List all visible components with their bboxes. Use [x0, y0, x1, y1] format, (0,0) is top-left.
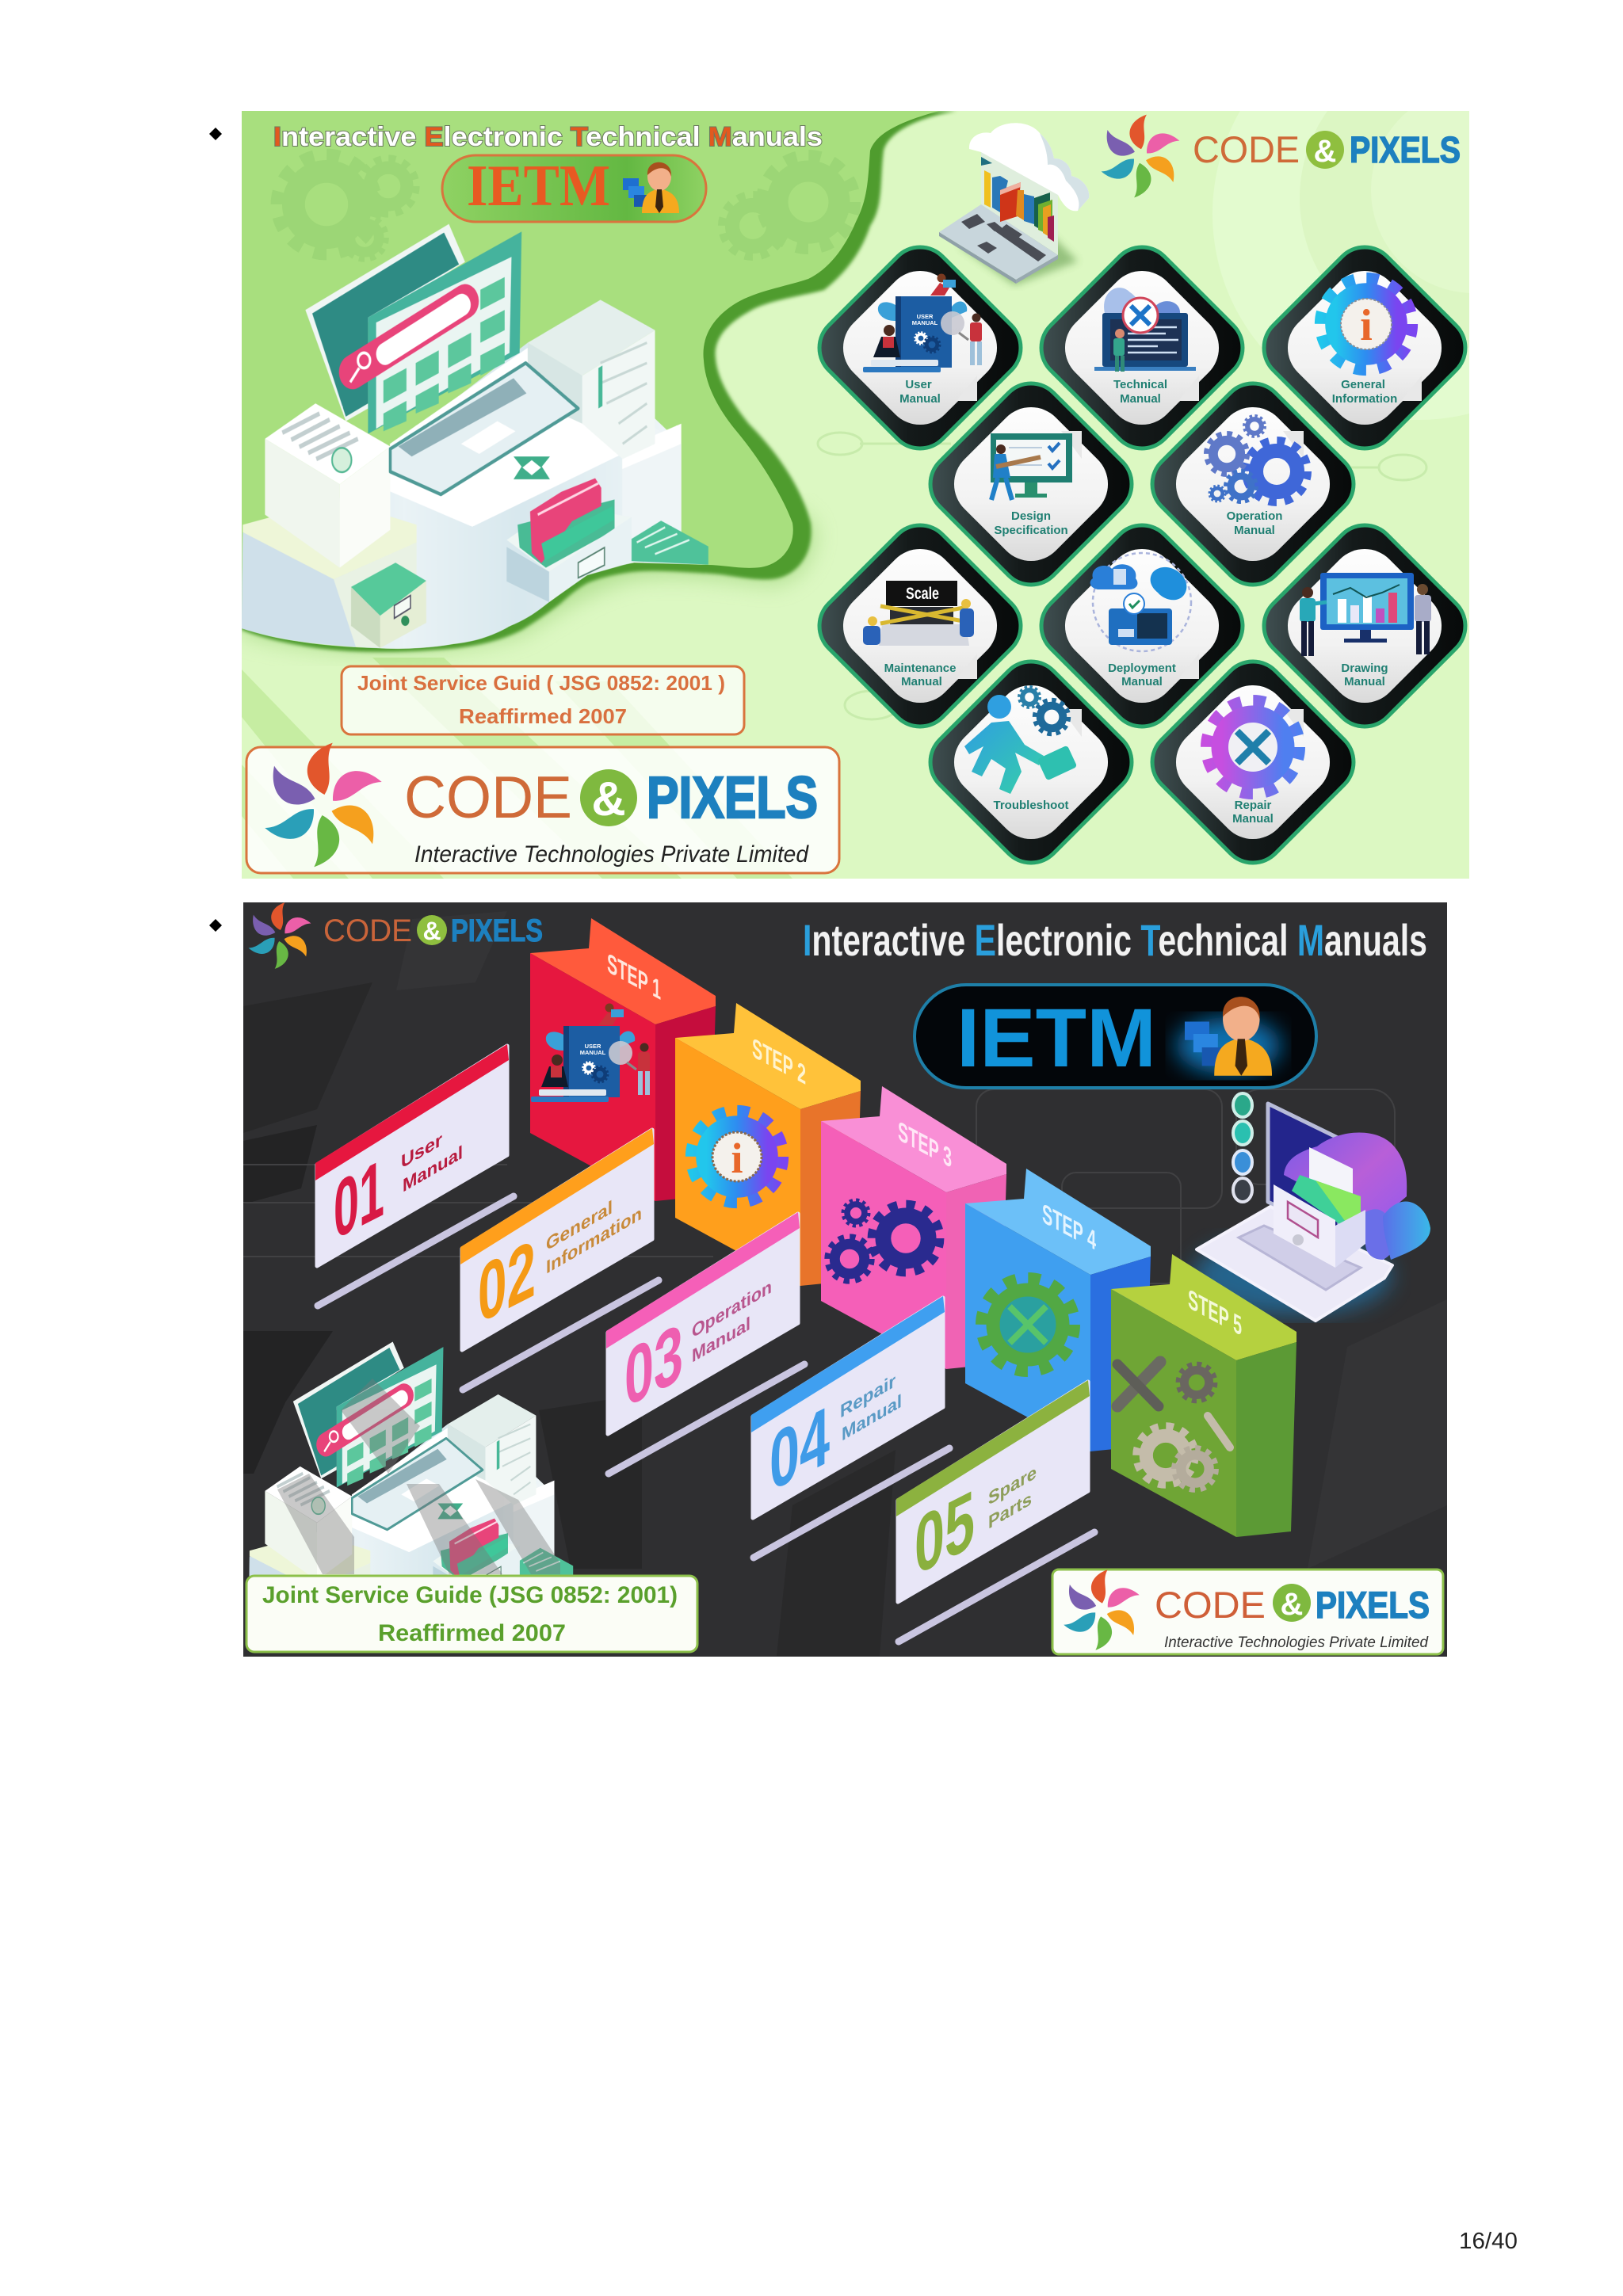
card 04: Repair [840, 1371, 896, 1423]
card 05: 05 [915, 1472, 975, 1593]
diamond: Operation Manual: Operation [1227, 509, 1282, 523]
diamond: Drawing Manual: Manual [1344, 675, 1385, 688]
step 1 block: STEP 1 [607, 947, 661, 1006]
step 2 block [675, 1003, 861, 1286]
IETM pill [442, 154, 706, 222]
diamond: Deployment Manual: Deployment [1108, 662, 1176, 675]
step 5 block [1111, 1254, 1296, 1537]
bullet 1 [209, 128, 222, 140]
card 03: Manual [692, 1314, 750, 1367]
logo: top right [1100, 115, 1461, 197]
card 02 [460, 1128, 659, 1390]
title: Interactive Electronic Technical Manuals [273, 122, 823, 152]
logo box: bottom left: PIXELS [647, 765, 818, 830]
diamond: Deployment Manual [1040, 523, 1244, 729]
translucent stripes over illustration [277, 1379, 560, 1574]
logo box: bottom left: CODE [404, 764, 572, 830]
callout: joint service guide: Reaffirmed 2007 [459, 704, 627, 728]
step 3 block: STEP 3 [898, 1115, 952, 1174]
card 04 [751, 1296, 949, 1558]
logo box: bottom right: & [1281, 1587, 1303, 1622]
card 01: Manual [403, 1142, 463, 1197]
card 02: General [546, 1197, 613, 1256]
diamond: Maintenance Manual: Maintenance [884, 662, 956, 675]
logo: top left [247, 902, 543, 969]
background gears [278, 156, 854, 259]
pale circles upper right [1212, 111, 1469, 420]
diamond: Technical Manual: Technical [1113, 378, 1167, 391]
diamond: User Manual: MANUAL [912, 319, 938, 326]
step 2 block: i [731, 1135, 743, 1182]
diamond: Operation Manual: Manual [1234, 524, 1275, 537]
logo: top right: PIXELS [1350, 129, 1461, 170]
illustration: laptop, documents and file drawers [242, 224, 708, 649]
logo: top left: CODE [323, 913, 412, 948]
diamond: Troubleshoot: Troubleshoot [994, 799, 1068, 812]
IETM pill: IETM [957, 992, 1156, 1085]
diamond: Drawing Manual: Drawing [1341, 662, 1388, 675]
icon: cloud library laptop [939, 123, 1089, 285]
card 05: Parts [988, 1489, 1032, 1534]
card 03: 03 [624, 1305, 683, 1425]
card 01: 01 [334, 1141, 384, 1257]
step 4 block [965, 1169, 1151, 1451]
card 03: Operation [692, 1276, 772, 1343]
diamond: Design Specification [929, 382, 1133, 586]
callout: joint service guide: Joint Service Guid ( JSG 0852: 2001 ) [357, 671, 725, 695]
logo box: bottom right: CODE [1155, 1584, 1266, 1626]
page number: 16/40 [1459, 2229, 1518, 2254]
diamond: Deployment Manual: Manual [1121, 675, 1163, 688]
panel background [242, 111, 1469, 879]
diamond: Technical Manual [1040, 246, 1244, 450]
diamond: Repair Manual: Repair [1235, 799, 1272, 812]
diamond: User Manual: Manual [899, 392, 941, 406]
logo: top left: & [422, 917, 441, 945]
panel: IETM dark steps [243, 902, 1447, 1657]
diamond: User Manual: User [905, 378, 932, 391]
card 01 [315, 1044, 514, 1306]
step 3 block [821, 1086, 1006, 1369]
diamond: Operation Manual [1151, 382, 1355, 586]
diamond: Drawing Manual [1262, 523, 1468, 729]
card 05: Spare [988, 1462, 1037, 1510]
diamond: General Information [1262, 246, 1468, 450]
card 02: Information [546, 1203, 642, 1279]
wave dark edge [242, 111, 957, 652]
callout: joint service guide [246, 1576, 697, 1652]
panel: IETM green overview [242, 111, 1469, 879]
diamond: Technical Manual: Manual [1120, 392, 1161, 406]
icon: cloud laptop with folders [1193, 1093, 1430, 1321]
callout: joint service guide [342, 666, 744, 734]
card 02: 02 [478, 1222, 536, 1341]
step 4 block: STEP 4 [1042, 1197, 1096, 1257]
diamond: Repair Manual [1151, 659, 1355, 865]
card 05 [896, 1380, 1094, 1642]
step 1 block [530, 918, 716, 1201]
card 01: User [401, 1129, 442, 1173]
logo: top right: CODE [1193, 128, 1300, 170]
title: Interactive Electronic Technical Manuals [803, 915, 1427, 965]
card 04: Manual [842, 1391, 902, 1446]
step 5 block: STEP 5 [1188, 1283, 1242, 1342]
diamond: Design Specification: Specification [994, 524, 1068, 537]
logo box: bottom left: & [591, 772, 626, 826]
diamond: Repair Manual: Manual [1232, 812, 1274, 826]
diamond: Maintenance Manual: Scale [906, 585, 939, 603]
IETM pill: IETM [467, 154, 610, 219]
callout: joint service guide: Joint Service Guide (JSG 0852: 2001) [262, 1582, 678, 1608]
diamond: Troubleshoot [929, 659, 1133, 865]
callout: joint service guide: Reaffirmed 2007 [378, 1620, 566, 1646]
bullet 2 [209, 919, 222, 932]
IETM pill [915, 985, 1316, 1088]
diamond: User Manual [818, 246, 1022, 450]
step 1 block: USER [585, 1043, 601, 1050]
panel background [243, 902, 1447, 1657]
illustration: faded laptop and files [249, 1341, 573, 1637]
diamond: General Information: Information [1332, 392, 1397, 406]
logo: top left: PIXELS [451, 913, 543, 948]
logo box: bottom right: Interactive Technologies Private Limited [1164, 1634, 1429, 1651]
card 03 [606, 1212, 804, 1474]
logo box: bottom right: PIXELS [1316, 1584, 1430, 1626]
diamond: Maintenance Manual: Manual [901, 675, 942, 688]
faint circuit lines [818, 433, 1426, 719]
logo: top right: & [1314, 134, 1336, 169]
logo box: bottom left: Interactive Technologies Private Limited [414, 841, 809, 868]
diamond: Maintenance Manual [818, 523, 1022, 729]
diamond: General Information: i [1360, 301, 1373, 350]
diamond: General Information: General [1341, 378, 1385, 391]
diamond: Design Specification: Design [1011, 509, 1051, 523]
step 1 block: MANUAL [580, 1049, 606, 1056]
logo box: bottom left [246, 743, 839, 873]
background texture [243, 911, 1447, 1656]
logo box: bottom right [1052, 1569, 1443, 1654]
diagonal stripes lower left [242, 658, 792, 879]
wave green region [242, 111, 939, 649]
card 04: 04 [769, 1388, 830, 1509]
step 2 block: STEP 2 [752, 1032, 806, 1091]
wave soft shadow [242, 507, 815, 651]
diamond: User Manual: USER [917, 313, 934, 320]
